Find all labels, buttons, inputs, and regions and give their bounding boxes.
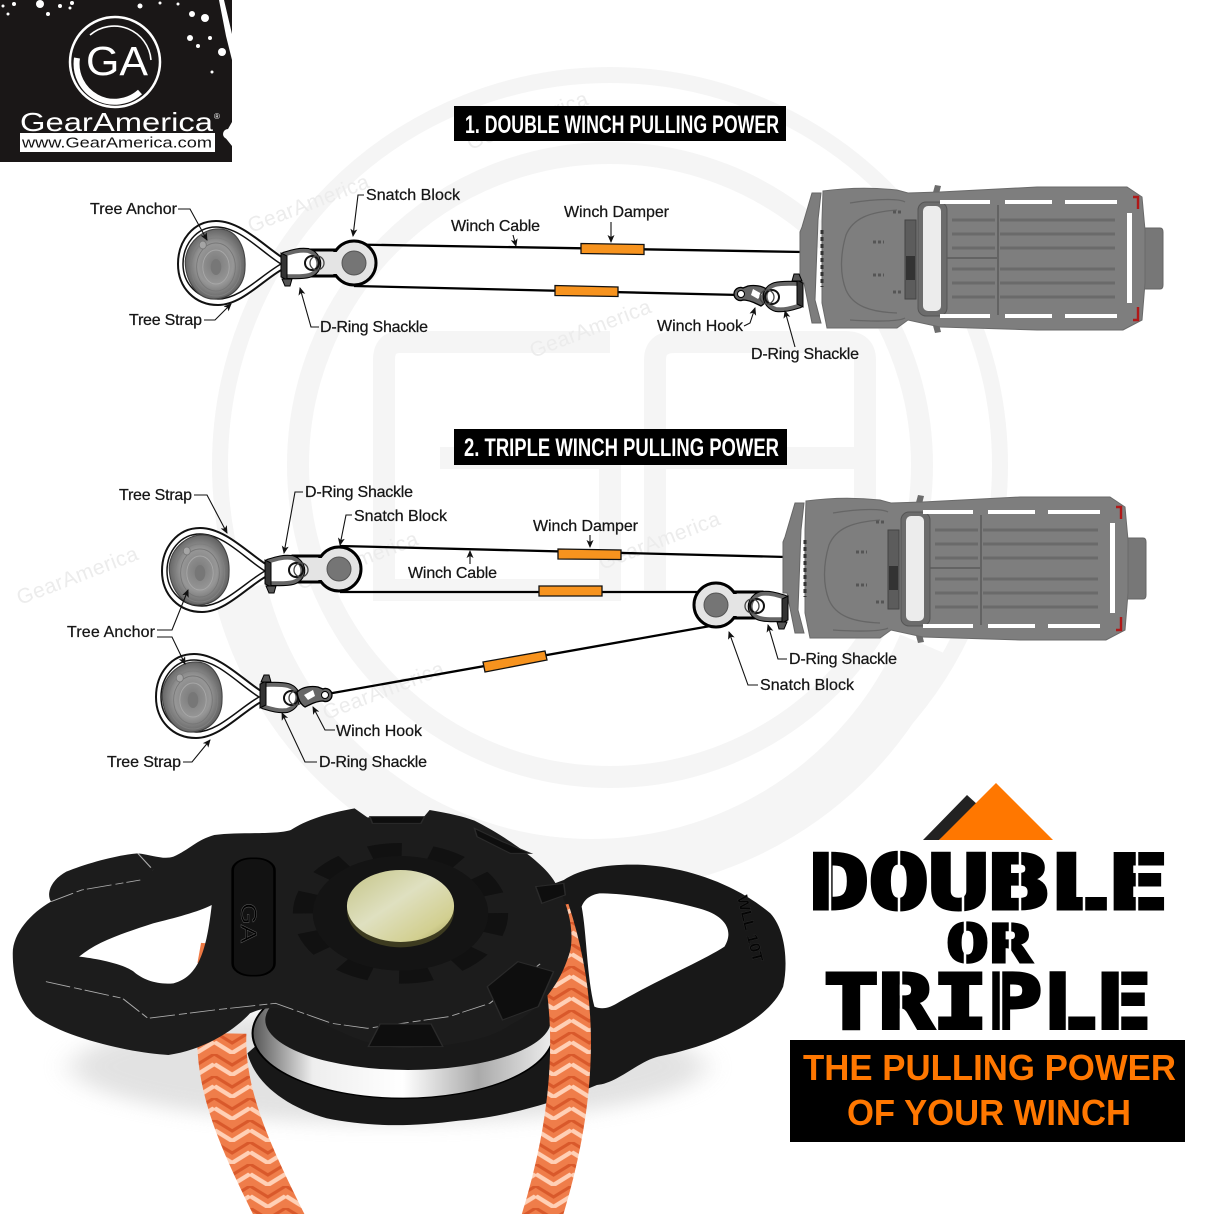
headline: DOUBLE: DOUBLE <box>809 838 1168 926</box>
winch dampers <box>555 244 644 296</box>
GA engraved slot: GA <box>236 903 261 943</box>
winch dampers <box>483 549 621 672</box>
upper tree and strap <box>162 528 268 612</box>
snatch block at truck <box>694 583 762 627</box>
lower tree and strap <box>156 654 262 738</box>
winch cables <box>354 244 803 295</box>
heading 1: 1. DOUBLE WINCH PULLING POWER <box>465 111 779 139</box>
labels diagram 1: D-Ring Shackle <box>751 346 859 363</box>
rear plate <box>247 865 786 1125</box>
labels diagram 1 <box>90 187 859 363</box>
labels diagram 2: Snatch Block <box>354 508 448 525</box>
labels diagram 2: Tree Anchor <box>67 624 156 641</box>
truck <box>800 185 1163 333</box>
labels diagram 2: D-Ring Shackle <box>319 754 427 771</box>
callout: pulling power <box>790 1040 1185 1142</box>
snatch block at tree <box>293 547 361 591</box>
labels diagram 2: Winch Damper <box>533 518 639 535</box>
logo emblem: GA <box>86 38 149 84</box>
labels diagram 1: Winch Damper <box>564 204 670 221</box>
diagram 2: triple line pull <box>67 484 1146 771</box>
heading 2: 2. TRIPLE WINCH PULLING POWER <box>464 434 779 462</box>
watermark text: GearAmerica <box>527 295 655 363</box>
labels diagram 2: D-Ring Shackle <box>305 484 413 501</box>
callout: pulling power: OF YOUR WINCH <box>847 1092 1131 1133</box>
brand logo panel: ® <box>214 112 220 121</box>
labels diagram 2 <box>67 484 897 771</box>
headline: TRIPLE: TRIPLE <box>824 958 1151 1046</box>
logo emblem <box>70 17 160 107</box>
diagram 1: double line pull <box>90 185 1163 363</box>
labels diagram 1: Tree Strap <box>129 312 202 329</box>
watermark text: GearAmerica <box>596 507 724 575</box>
shackles <box>260 558 788 710</box>
right rope <box>541 907 571 1214</box>
winch hook <box>297 687 332 707</box>
brand logo panel <box>0 0 233 162</box>
d-ring shackle at tree <box>281 251 324 286</box>
labels diagram 1: Winch Cable <box>451 218 540 235</box>
GA engraved slot <box>233 858 274 976</box>
callout: pulling power: THE PULLING POWER <box>803 1047 1176 1088</box>
product photo: snatch block pulley with rope <box>13 808 786 1214</box>
labels diagram 2: Winch Cable <box>408 565 497 582</box>
headline: OR: OR <box>946 914 1032 975</box>
centre bolt <box>347 870 454 947</box>
labels diagram 1: Winch Hook <box>657 318 744 335</box>
front plate <box>13 808 571 1055</box>
labels diagram 1: D-Ring Shackle <box>320 319 428 336</box>
watermark text: GearAmerica <box>294 527 422 595</box>
left rope <box>203 943 282 1214</box>
WLL engraving: WLL 10T <box>733 894 766 964</box>
labels diagram 2: Winch Hook <box>336 723 423 740</box>
soft shadow <box>71 1010 704 1123</box>
tree and strap <box>178 221 284 305</box>
heading 2 <box>454 429 787 465</box>
labels diagram 2: Snatch Block <box>760 677 855 694</box>
recessed gear <box>305 851 496 976</box>
heading 1 <box>454 106 786 141</box>
background watermark: GA logo rings <box>220 75 1000 866</box>
labels diagram 2: D-Ring Shackle <box>789 651 897 668</box>
watermark text: GearAmerica <box>320 657 448 725</box>
logo wordmark: GearAmerica <box>20 107 214 137</box>
watermark text: GearAmerica <box>14 542 142 610</box>
headline icon: mountain peaks <box>923 783 1053 840</box>
watermark text: GearAmerica <box>245 170 373 238</box>
truck <box>783 495 1146 643</box>
labels diagram 1: Snatch Block <box>366 187 461 204</box>
labels diagram 2: Tree Strap <box>119 487 192 504</box>
glossy edge highlights <box>46 853 541 1028</box>
stencil gaps <box>830 850 1137 1032</box>
winch cables <box>327 546 786 694</box>
labels diagram 1: Tree Anchor <box>90 201 178 218</box>
logo url bar: www.GearAmerica.com <box>21 134 212 152</box>
labels diagram 2: Tree Strap <box>107 754 181 771</box>
rim notches <box>368 817 565 1047</box>
snatch block <box>308 241 376 285</box>
watermark text <box>14 87 724 725</box>
winch hook and shackle at truck <box>734 274 803 309</box>
watermark text: GearAmerica <box>464 87 592 155</box>
aluminium sheave <box>253 968 554 1098</box>
